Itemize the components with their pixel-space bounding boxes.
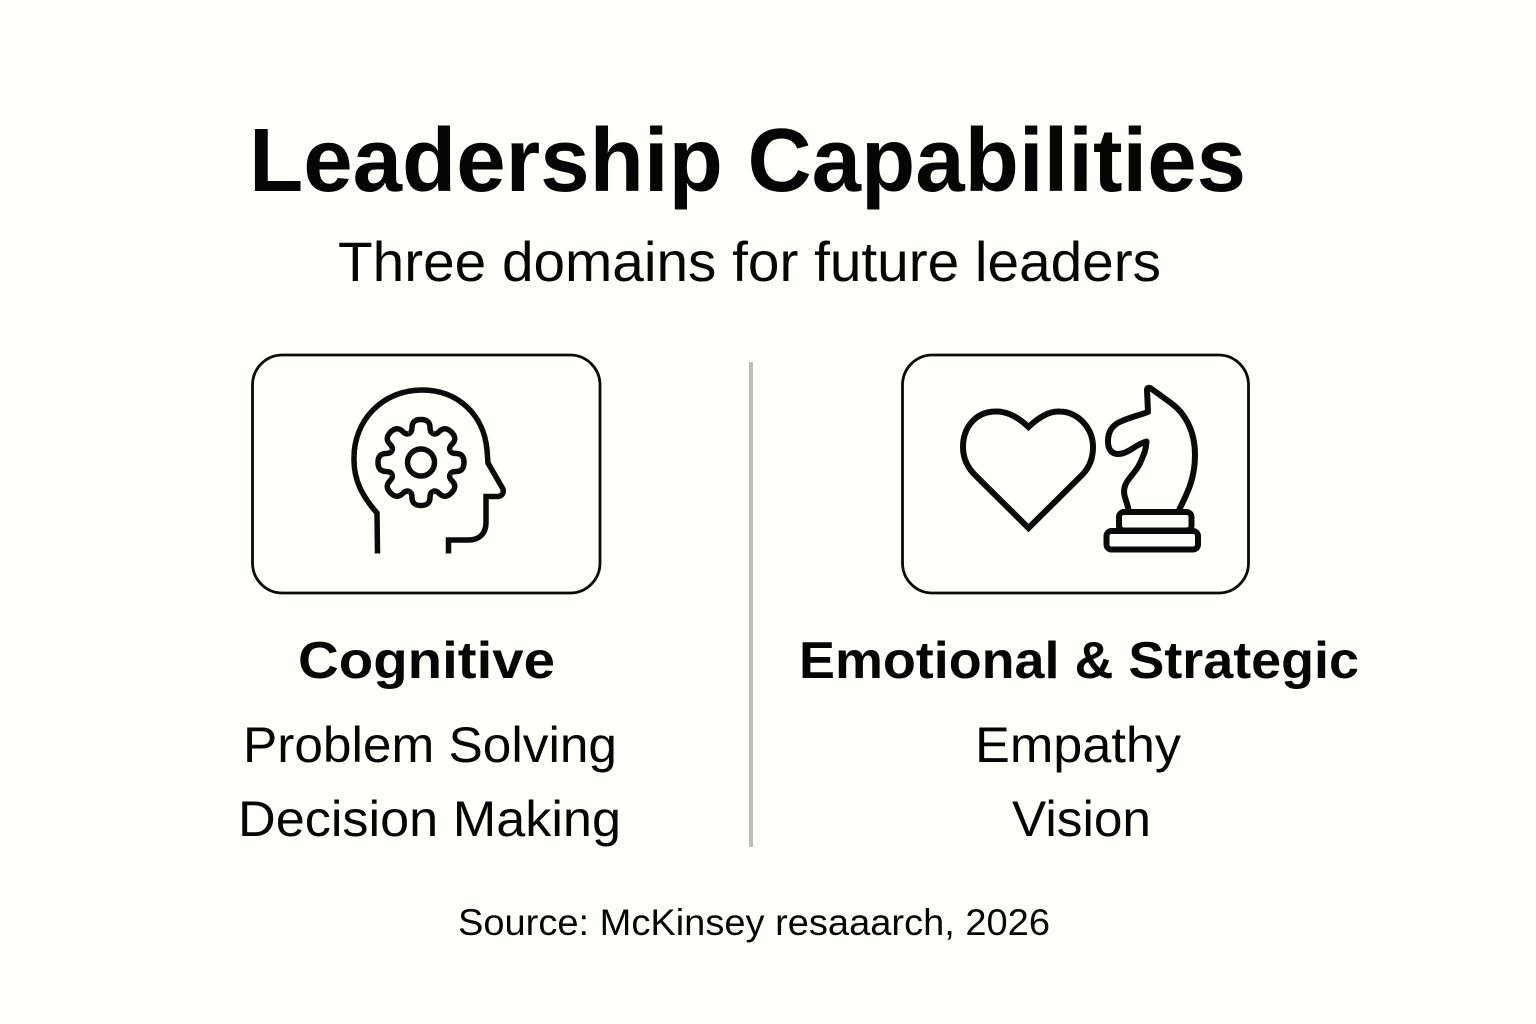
head outline xyxy=(354,390,503,554)
list: cognitive items xyxy=(238,717,621,847)
item: Decision Making: Decision Making xyxy=(238,791,621,847)
item: Vision: Vision xyxy=(1012,791,1151,847)
source note: Source: McKinsey resaaarch, 2026 xyxy=(458,902,1050,943)
heading: Emotional and Strategic: Emotional & Strategic xyxy=(799,632,1359,690)
icon: heart xyxy=(963,411,1093,528)
knight body xyxy=(1108,388,1195,510)
icon: head with gear xyxy=(354,390,503,554)
title: Leadership Capabilities xyxy=(249,111,1246,211)
divider xyxy=(749,362,753,847)
icon: chess knight xyxy=(1106,388,1198,550)
item: Empathy: Empathy xyxy=(975,717,1181,773)
heading: Cognitive: Cognitive xyxy=(298,632,555,690)
gear xyxy=(378,420,464,506)
knight upper base xyxy=(1119,512,1192,530)
knight lower base xyxy=(1106,531,1198,550)
list: emotional and strategic items xyxy=(975,717,1181,847)
subtitle: Three domains for future leaders xyxy=(338,230,1161,293)
item: Problem Solving: Problem Solving xyxy=(243,717,617,773)
panel: cognitive icon card xyxy=(252,355,600,593)
panel: emotional and strategic icon card xyxy=(902,355,1248,593)
